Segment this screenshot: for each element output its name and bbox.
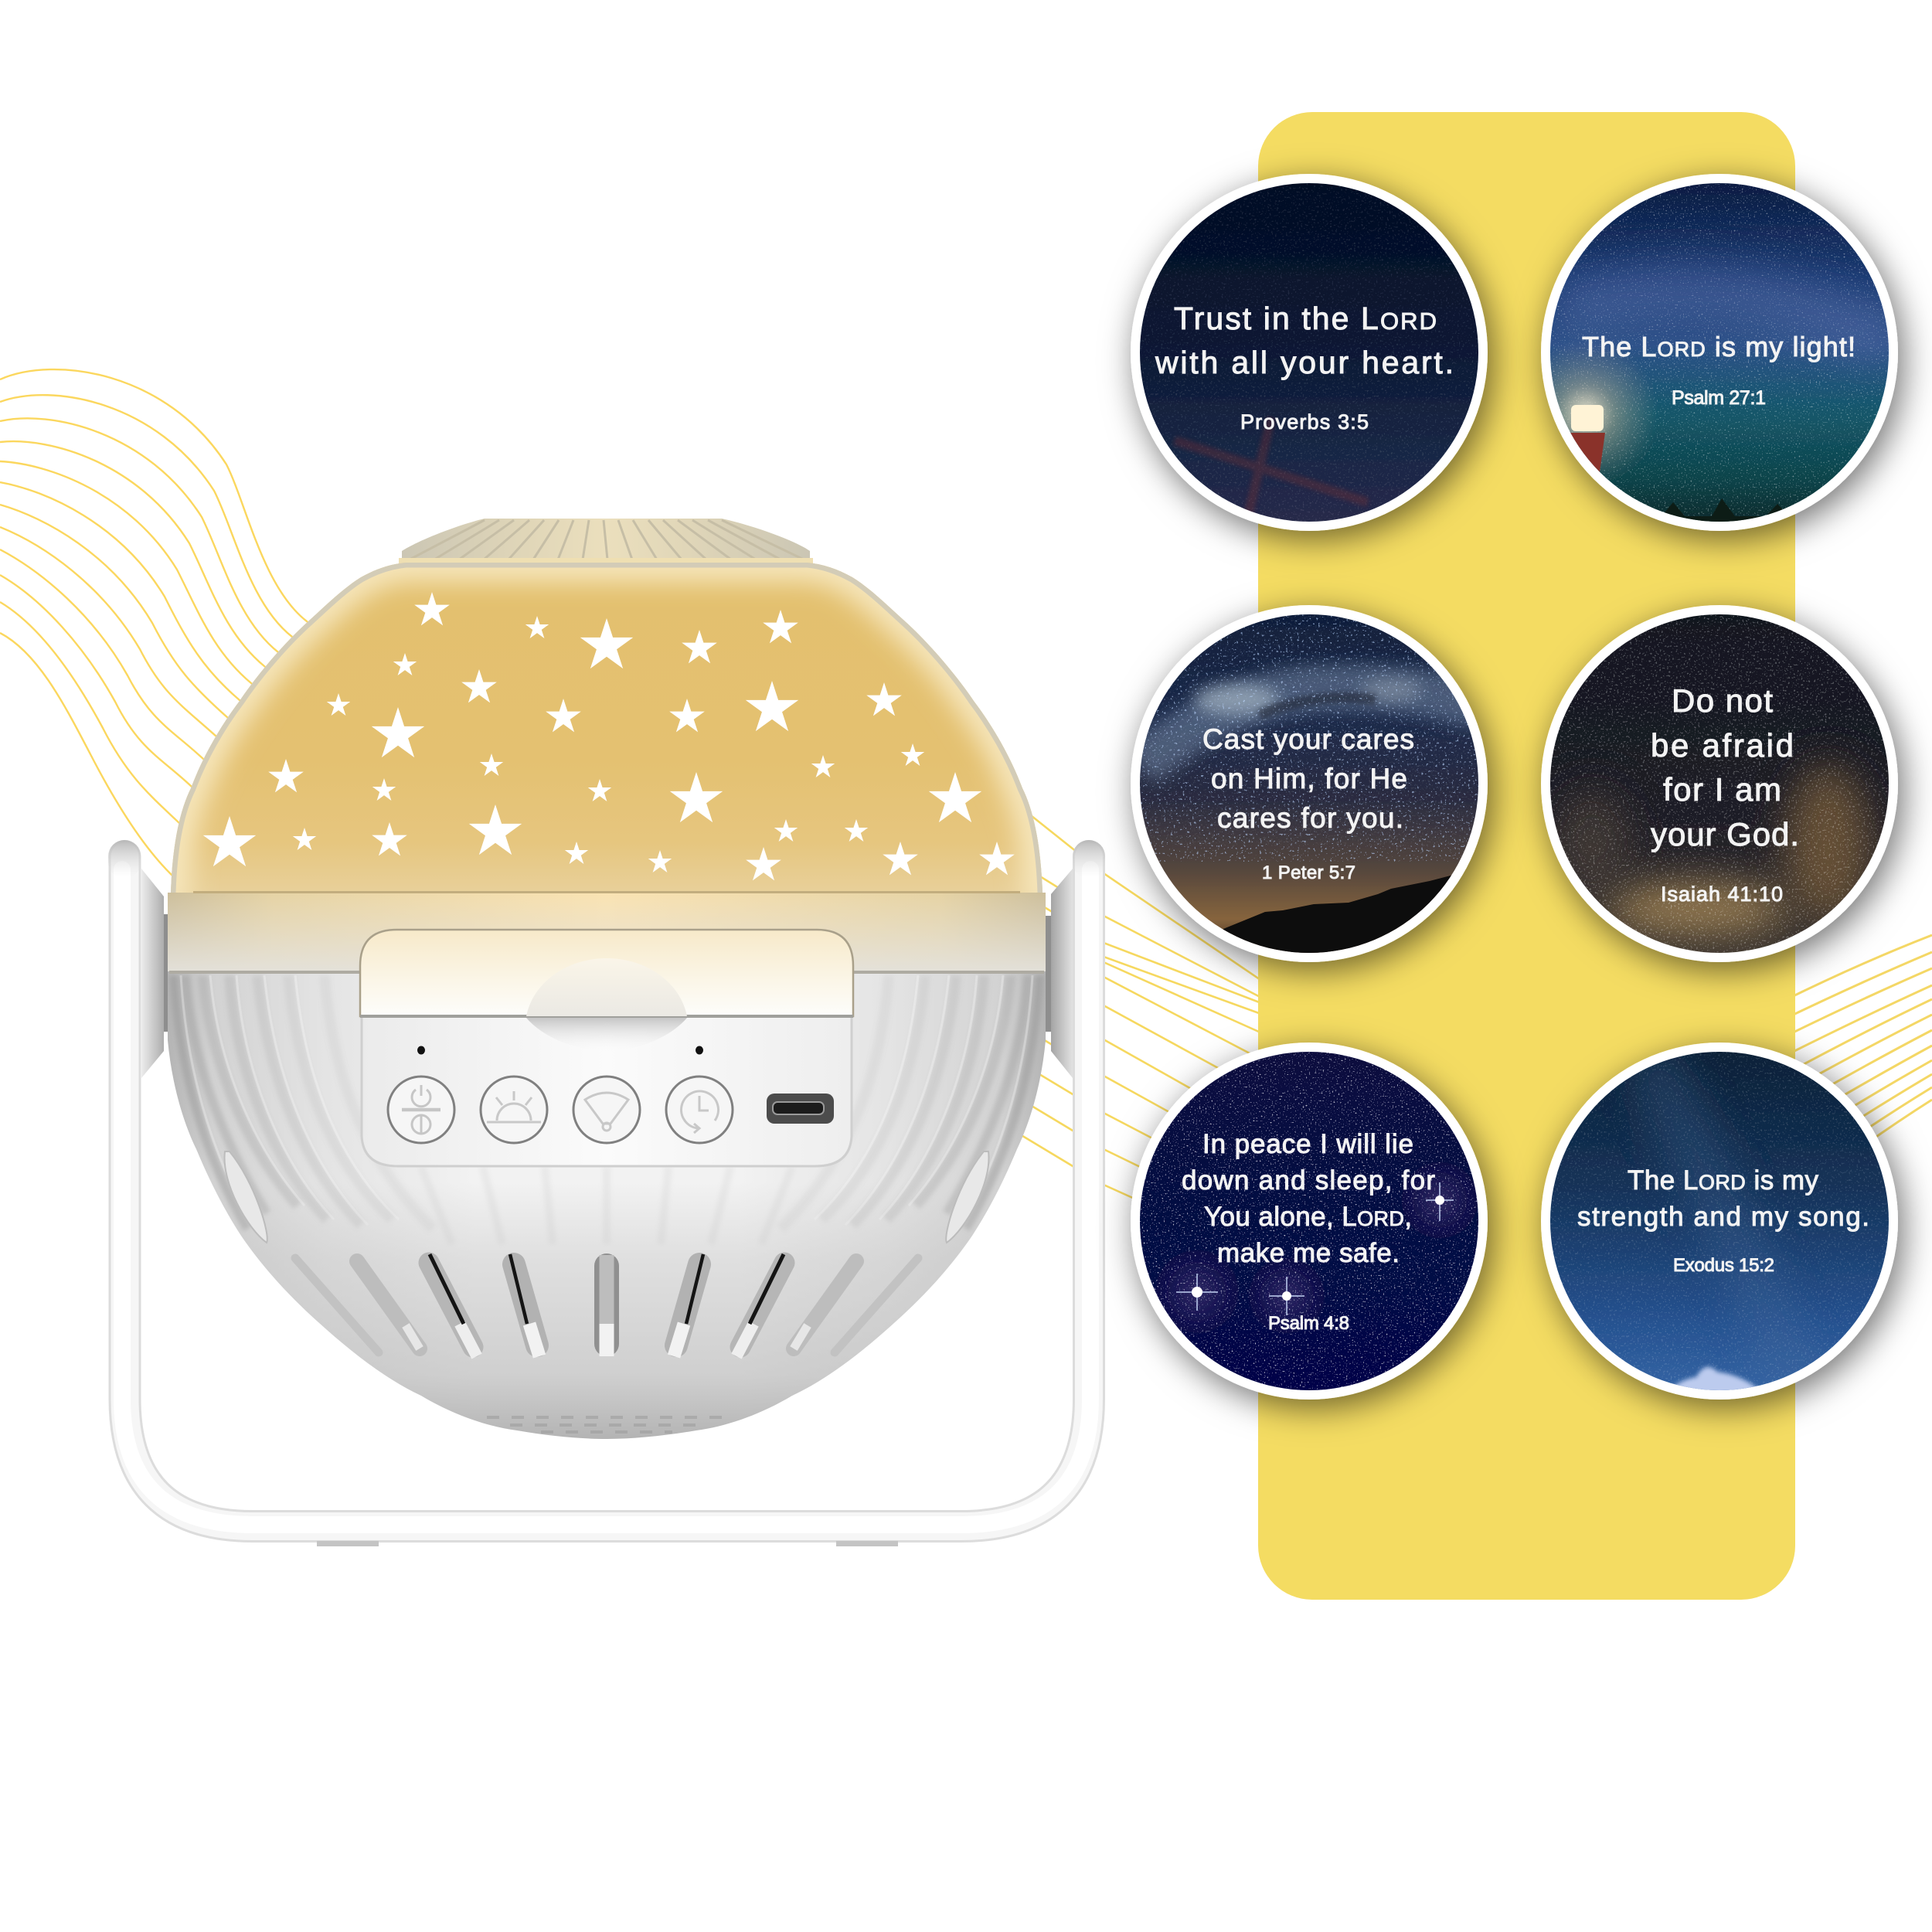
button: power xyxy=(388,1077,454,1143)
usb port xyxy=(767,1094,834,1124)
stand tips xyxy=(108,840,1105,879)
photo: starfield with sparkles xyxy=(1140,1052,1478,1390)
wave lines: left group xyxy=(0,369,316,889)
photo: night sky with faint cross xyxy=(1140,183,1478,526)
photo: lighthouse under stars xyxy=(1550,183,1889,522)
verse text xyxy=(1182,1129,1435,1334)
verse text: Psalm 27:1 xyxy=(1672,387,1766,409)
verse text: cares for you. xyxy=(1217,802,1403,834)
bottom vents xyxy=(295,1254,918,1356)
wave lines: centre group xyxy=(1020,807,1267,1206)
infographic canvas xyxy=(0,112,1932,1600)
verse text: Proverbs 3:5 xyxy=(1240,410,1369,434)
verse text: In peace I will lie xyxy=(1202,1129,1413,1159)
control panel xyxy=(360,930,853,1166)
verse text xyxy=(1155,301,1454,434)
verse 4 circle xyxy=(1541,605,1898,962)
lower body xyxy=(155,966,1059,1445)
verse text xyxy=(1577,1165,1869,1276)
verse text: Psalm 4:8 xyxy=(1268,1313,1349,1334)
wave lines: right group xyxy=(1785,935,1932,1204)
right hub xyxy=(1043,869,1073,1078)
verse text: your God. xyxy=(1651,816,1799,852)
cap xyxy=(399,519,813,563)
verse text: with all your heart. xyxy=(1155,345,1454,380)
verse text: strength and my song. xyxy=(1577,1202,1869,1232)
verse text: make me safe. xyxy=(1217,1238,1400,1268)
dome xyxy=(171,563,1043,908)
verse text: down and sleep, for xyxy=(1182,1165,1435,1196)
verse text: The LORD is my xyxy=(1628,1165,1819,1196)
verse text xyxy=(1582,331,1855,409)
side vents xyxy=(225,1151,988,1243)
button: sun xyxy=(481,1077,547,1143)
verse text: for I am xyxy=(1663,771,1781,808)
button: fan xyxy=(573,1077,640,1143)
verse text: You alone, LORD, xyxy=(1204,1202,1412,1232)
verse text: be afraid xyxy=(1651,727,1794,764)
stars xyxy=(203,592,1015,880)
photo: milky way over hills xyxy=(1140,614,1492,958)
indicator dots xyxy=(417,1046,703,1054)
verse 2 circle xyxy=(1512,174,1898,531)
verse text: Isaiah 41:10 xyxy=(1661,883,1783,906)
verse text xyxy=(1202,723,1414,883)
stand feet xyxy=(317,1541,898,1546)
left hub xyxy=(141,869,170,1078)
verse 3 circle xyxy=(1131,605,1492,962)
product: projector xyxy=(108,519,1105,1546)
stand frame xyxy=(122,856,1090,1526)
verse text: Cast your cares xyxy=(1202,723,1414,755)
verse 5 circle xyxy=(1131,1043,1488,1400)
verse 1 circle xyxy=(1131,174,1488,531)
yellow panel xyxy=(1258,112,1795,1600)
verse text: Exodus 15:2 xyxy=(1673,1255,1774,1276)
verse text: 1 Peter 5:7 xyxy=(1262,862,1355,883)
verse text: The LORD is my light! xyxy=(1582,331,1855,362)
photo: blue milky way and cloud xyxy=(1550,1052,1889,1399)
warm band xyxy=(168,893,1046,974)
verse text: on Him, for He xyxy=(1211,763,1407,794)
verse text xyxy=(1651,682,1799,906)
speaker grille xyxy=(487,1417,726,1432)
sensor bump xyxy=(526,958,687,1051)
verse 6 circle xyxy=(1541,1043,1898,1400)
verse text: Do not xyxy=(1672,682,1773,719)
photo: stars and amber clouds xyxy=(1550,614,1889,953)
verse text: Trust in the LORD xyxy=(1174,301,1437,336)
button: timer xyxy=(666,1077,733,1143)
